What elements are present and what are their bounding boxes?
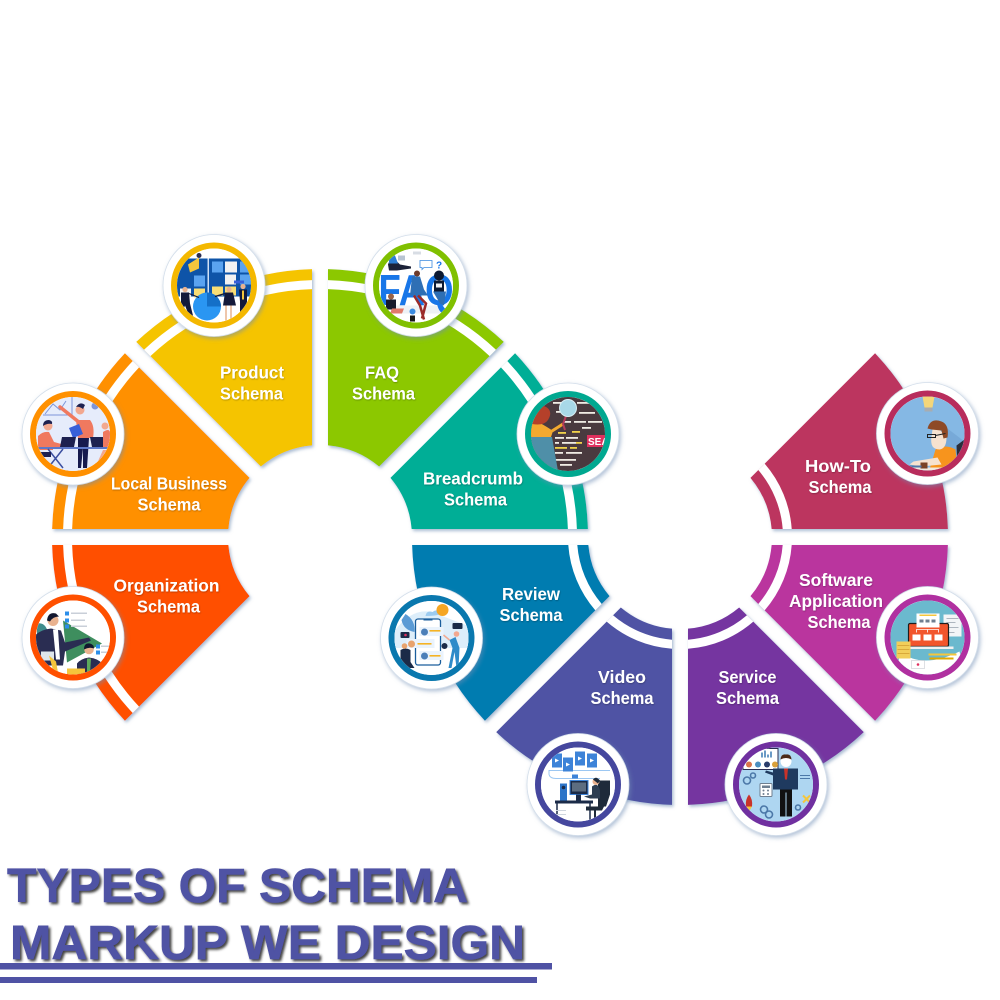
label: product	[220, 362, 284, 404]
label: organization: Organization	[114, 576, 220, 596]
sector: software application	[750, 545, 948, 721]
label: software application: Software	[799, 570, 873, 590]
panel: How-To Schema	[735, 353, 999, 617]
label: organization	[114, 576, 220, 616]
label: breadcrumb: Breadcrumb	[423, 468, 523, 488]
label: local business: Schema	[138, 494, 201, 514]
label: service: Service	[718, 667, 777, 687]
icon: video workstation	[527, 734, 629, 836]
label: service	[716, 667, 779, 708]
icon: software laptop	[876, 586, 978, 688]
sector: video	[496, 607, 672, 805]
icon: local business meeting	[22, 383, 124, 485]
icon: breadcrumb code search	[517, 383, 619, 485]
panel: Local Business Schema	[52, 353, 250, 529]
label: faq	[352, 362, 415, 404]
icon: faq people	[365, 234, 467, 336]
label: review	[500, 584, 563, 625]
panel: Breadcrumb Schema	[375, 353, 639, 617]
label: how-to	[805, 456, 872, 497]
icon: organization team	[22, 586, 124, 688]
panel: FAQ Schema	[328, 269, 504, 467]
sector: breadcrumb	[375, 353, 639, 617]
panel: Organization Schema	[1, 457, 265, 721]
panel: Review Schema	[361, 457, 625, 721]
icon: review phone	[380, 587, 482, 689]
panel: Service Schema	[600, 592, 864, 856]
label: organization: Schema	[137, 596, 200, 616]
title line 2: MARKUP WE DESIGN	[10, 917, 525, 970]
label: faq: FAQ	[365, 362, 399, 382]
label: video: Schema	[590, 688, 654, 708]
panel: Video Schema	[496, 607, 672, 805]
sector: organization	[1, 457, 265, 721]
label: product: Product	[220, 362, 284, 382]
panel: Product Schema	[136, 218, 400, 482]
icon: product board	[163, 234, 265, 336]
label: faq: Schema	[352, 384, 415, 404]
label: how-to: Schema	[808, 477, 872, 497]
sector: product	[136, 218, 400, 482]
label: service: Schema	[716, 688, 779, 708]
icon: breadcrumb code search: SEA	[588, 437, 609, 448]
label: breadcrumb	[423, 468, 523, 510]
icon: how-to developer	[876, 382, 978, 484]
label: software application: Application	[789, 591, 883, 611]
label: review: Schema	[500, 605, 563, 625]
label: breadcrumb: Schema	[444, 490, 507, 510]
title	[0, 860, 552, 983]
label: software application	[789, 570, 883, 632]
icon: service presenter	[725, 734, 827, 836]
sector: service	[600, 592, 864, 856]
label: local business: Local Business	[111, 474, 227, 494]
icon: faq people: FAQ	[378, 266, 454, 315]
label: software application: Schema	[808, 612, 871, 632]
label: video	[590, 667, 654, 708]
label: review: Review	[502, 584, 560, 604]
label: how-to: How-To	[805, 456, 871, 476]
label: video: Video	[598, 667, 646, 687]
sector: how-to	[735, 353, 999, 617]
sector: faq	[328, 269, 504, 467]
sector: review	[361, 457, 625, 721]
title line 1: TYPES OF SCHEMA	[7, 860, 468, 913]
icon: faq people: ?	[436, 260, 442, 272]
panel: Software Application Schema	[750, 545, 948, 721]
label: product: Schema	[220, 384, 283, 404]
sector: local business	[52, 353, 250, 529]
label: local business	[111, 474, 227, 514]
